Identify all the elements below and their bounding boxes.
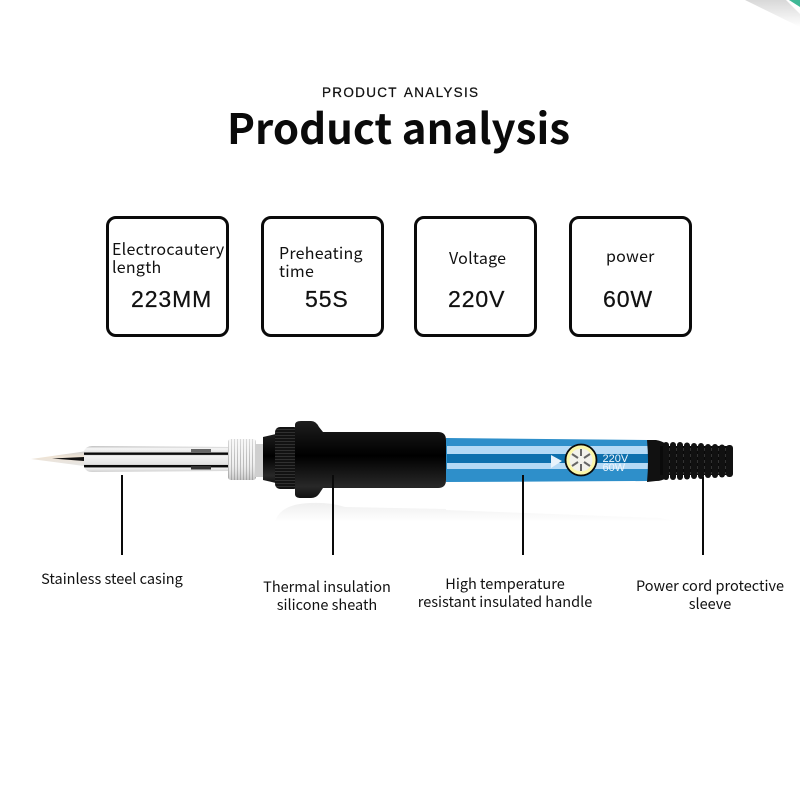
- steel casing: [84, 446, 232, 472]
- reflection: [275, 503, 680, 522]
- label: preheating time: time: [279, 258, 314, 282]
- panel: power: [569, 216, 692, 337]
- value: 55S: 55S: [305, 286, 349, 312]
- silicone sheath: [295, 421, 446, 498]
- leader line: sleeve: [702, 477, 704, 555]
- panel: electrocautery length: [106, 216, 229, 337]
- caption: thermal insulation silicone sheath: silicone sheath: [277, 594, 377, 615]
- knurled nut: [228, 439, 256, 480]
- blue handle: [446, 438, 648, 482]
- caption: high temperature resistant insulated handle: [418, 573, 592, 612]
- caption: thermal insulation silicone sheath: [263, 576, 391, 615]
- caption: power cord protective sleeve: sleeve: [689, 593, 731, 614]
- label: preheating time: Preheating: [279, 240, 363, 264]
- title: Product analysis: [227, 96, 570, 157]
- caption: power cord protective sleeve: Power cord protective: [636, 575, 784, 596]
- label: electrocautery length: length: [112, 254, 161, 278]
- caption: high temperature resistant insulated handle: resistant insulated handle: [418, 591, 592, 612]
- value: 220V: 220V: [448, 286, 505, 312]
- subtitle: PRODUCT ANALYSIS: [322, 85, 479, 100]
- caption: stainless steel casing: Stainless steel casing: [41, 568, 183, 589]
- leader line: casing: [121, 475, 123, 555]
- caption: high temperature resistant insulated handle: High temperature: [445, 573, 565, 594]
- dial: [566, 444, 596, 476]
- label: electrocautery length: [112, 236, 224, 278]
- tip: [31, 452, 84, 466]
- black neck: [263, 434, 276, 483]
- label: voltage: Voltage: [449, 245, 506, 269]
- leader line: handle: [522, 475, 524, 555]
- power cord sleeve: [647, 440, 733, 482]
- caption: power cord protective sleeve: [636, 575, 784, 614]
- handle markings: 220V: [602, 453, 629, 465]
- panel: voltage: [414, 216, 537, 337]
- label: preheating time: [279, 240, 363, 282]
- value: 223MM: 223MM: [131, 286, 212, 312]
- caption: thermal insulation silicone sheath: Thermal insulation: [263, 576, 391, 597]
- label: power: power: [606, 243, 655, 267]
- leader line: sheath: [332, 475, 334, 555]
- arrow: [551, 455, 562, 468]
- panel: preheating time: [261, 216, 384, 337]
- value: 60W: 60W: [603, 286, 653, 312]
- collar: [255, 444, 264, 477]
- label: electrocautery length: Electrocautery: [112, 236, 224, 260]
- ribbed ring: [275, 427, 299, 489]
- blue handle: 60W: [602, 462, 626, 474]
